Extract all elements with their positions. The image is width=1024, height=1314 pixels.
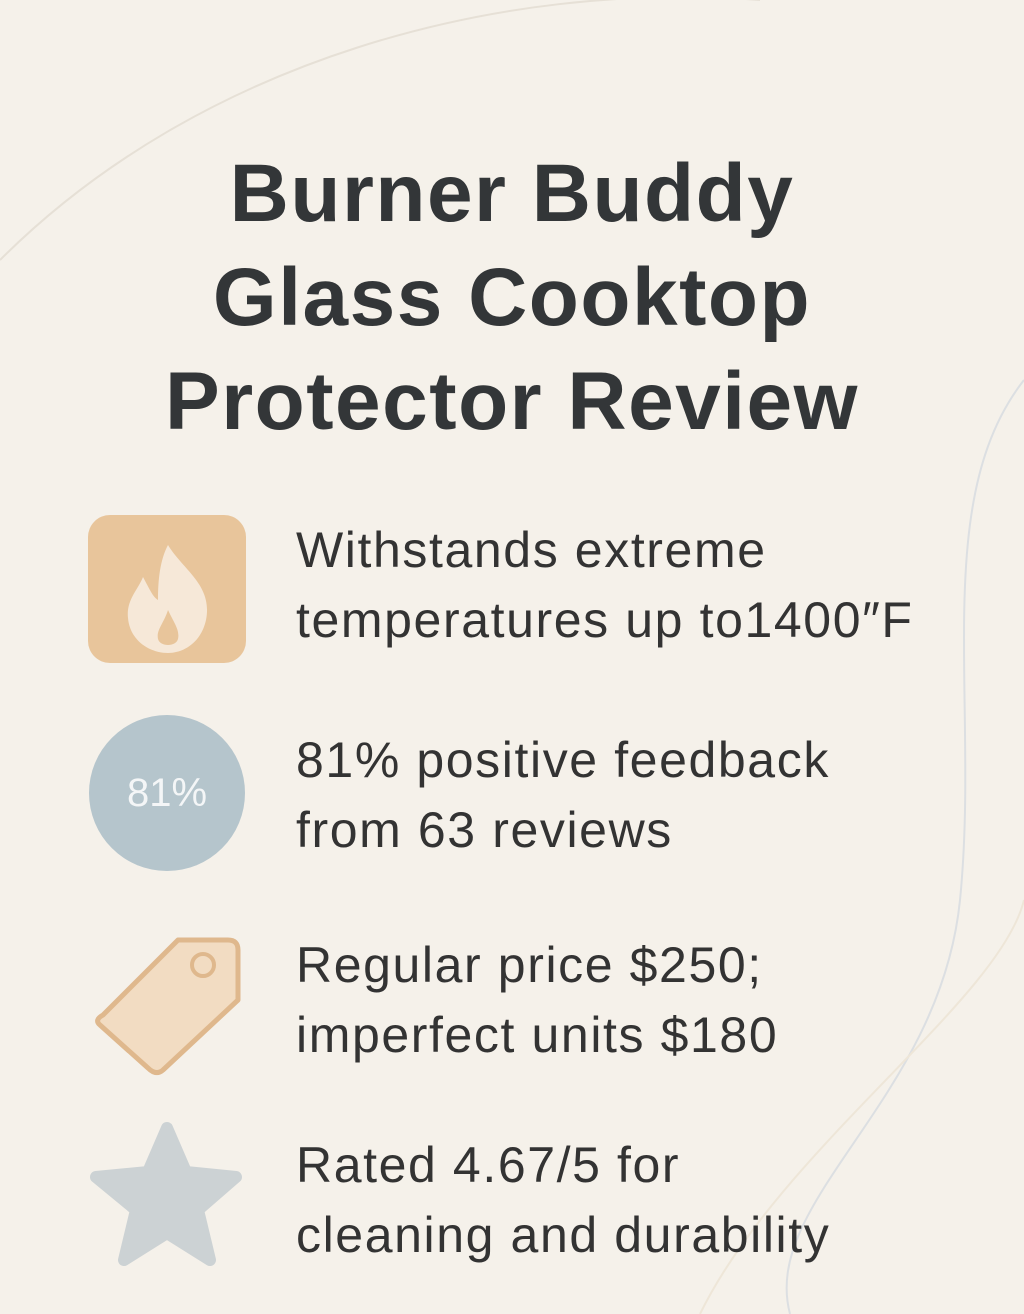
- text: Regular price $250;: [296, 937, 763, 993]
- text: Withstands extreme: [296, 522, 767, 578]
- icon: price tag: [95, 938, 240, 1076]
- icon: flame: [88, 515, 246, 663]
- text: from 63 reviews: [296, 802, 673, 858]
- row: temperature: [88, 515, 914, 663]
- text: cleaning and durability: [296, 1207, 830, 1263]
- text: [296, 1137, 830, 1263]
- title: [165, 148, 859, 447]
- title: Burner Buddy: [230, 148, 794, 239]
- text: temperatures up to1400″F: [296, 592, 914, 648]
- text: 81% positive feedback: [296, 732, 830, 788]
- title: Protector Review: [165, 356, 859, 447]
- text: [296, 522, 914, 648]
- row: rating: [90, 1122, 830, 1266]
- row: price: [95, 937, 778, 1076]
- text: [296, 732, 830, 858]
- icon: 81% circle: [89, 715, 245, 871]
- row: feedback: [89, 715, 830, 871]
- title: Glass Cooktop: [213, 252, 811, 343]
- text: Rated 4.67/5 for: [296, 1137, 680, 1193]
- icon: 81% circle: 81%: [127, 771, 207, 815]
- text: imperfect units $180: [296, 1007, 778, 1063]
- icon: star: [90, 1122, 242, 1266]
- text: [296, 937, 778, 1063]
